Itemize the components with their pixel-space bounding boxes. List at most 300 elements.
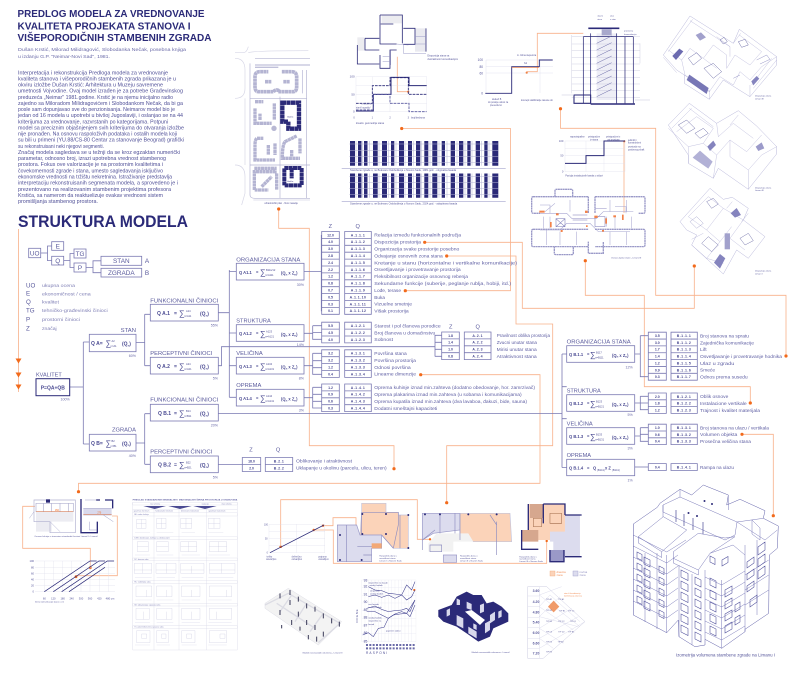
- box: QB.2 perceptivni cinioci: B22: [186, 461, 191, 465]
- image: apartment plan top: dvotraktnom komunikacijom: [427, 58, 458, 61]
- table: B.1.2: Trajnost i kvalitet materijala: [700, 408, 760, 413]
- image: apartment plan peach 1: Limani I u Novom Sadu: [379, 560, 403, 562]
- table: B.1.1: B.1.1.1: [677, 334, 691, 338]
- chart: span diamond table: TIP A1: [558, 598, 564, 601]
- box: zgrada: 40%: [129, 454, 137, 458]
- image: isometric apartment Limani III: Limani III: [755, 98, 764, 100]
- box: QB.2 perceptivni cinioci: 5%: [213, 476, 219, 480]
- box: QB.2 perceptivni cinioci: Q B.2: [158, 462, 171, 468]
- chart: span diamond table: TIP D3: [546, 642, 553, 644]
- table: B.1.2: 1.8: [655, 402, 660, 406]
- table: A.1.1: 3.0: [328, 247, 333, 251]
- box: QB.1 funkcionalni cinioci: 20%: [211, 424, 219, 428]
- chart: ratings by span: [355, 578, 416, 655]
- table: B.2: Uklapanje u okolinu (parcelu, ulicu, teren): [296, 466, 387, 471]
- table: A.1.1: A.1.1.10: [350, 295, 366, 299]
- table: A.1.1: A.1.1.6: [351, 268, 365, 272]
- table: A.1.3: A.1.3.1: [351, 352, 365, 356]
- box: organizacija stana B: n=B111: [595, 355, 604, 359]
- table: B.2: B.2.2: [274, 466, 284, 470]
- box: QB.1 funkcionalni cinioci: B14: [186, 409, 191, 413]
- image: apartment plan peach 3: Raspodela dana u: [519, 556, 538, 558]
- chart: ratings by span: poprečni zidovi: [386, 630, 401, 633]
- intro text block: Krstića, sa namerom da reaktuelizuje ovakav vrednosni sistem: [18, 193, 163, 199]
- table: B.1.1: Smeće: [700, 368, 715, 373]
- table: A.1.4: Oprema kupatila iznad min.zahteva (dva lavaboa, đakuzi, bide, sauna): [374, 399, 527, 404]
- box: QB.1 funkcionalni cinioci: ∑: [179, 409, 185, 418]
- image: minimum width tables sheet: apartman minimum: [134, 509, 150, 512]
- chart: span diamond table: TIP C1: [568, 611, 574, 613]
- title: PREDLOG MODELA ZA VREDNOVANJE: [18, 9, 205, 20]
- box: QB.1 funkcionalni cinioci: Q B.1: [158, 411, 171, 417]
- model key diagram: [29, 242, 150, 277]
- image: kitchen plans: Osnova kuhinje u stanovima standardni tlocrtovi Limani II i Limani I: [34, 535, 98, 538]
- box: QB.2 perceptivni cinioci: [150, 449, 219, 480]
- box: QB.2 perceptivni cinioci: ∑: [179, 461, 185, 470]
- table: B.1.3: Volumen objekta: [700, 432, 738, 437]
- chart: installation steps: Pozicija instalacionih kanala u zidovi: [565, 174, 603, 177]
- image: kitchen plans: 260: [55, 510, 60, 512]
- table: A.1.4: A.1.4.2: [351, 393, 365, 397]
- table: A.1.1: Fleksibilnost organizacije osnovnog rebenja: [374, 274, 468, 279]
- image: navy volume isometry: [438, 592, 511, 654]
- table: B.1.1: [648, 332, 782, 380]
- image: apartment plan peach 3: [519, 504, 582, 563]
- image: facades: [342, 141, 506, 206]
- image: isometric apartment Limani I: Limani I: [755, 273, 763, 275]
- box: zgrada: n=B1: [110, 444, 117, 448]
- box: struktura A: [236, 318, 305, 347]
- chart: apartment rating steps: [350, 75, 427, 125]
- legend: P: [26, 317, 30, 324]
- intro text block: model sa preciznim objašnjenjem svih kriterijuma do otvaranja izložbe: [18, 126, 184, 132]
- box: zgrada: ZGRADA: [112, 428, 136, 434]
- image: minimum width tables sheet: RC: roditeljska soba: [134, 581, 152, 584]
- box: QA.2 perceptivni cinioci: [150, 350, 219, 380]
- image: isometric apartment Limani III: Dispozicija stana: [755, 95, 772, 98]
- intro text block: jedan od 16 modela u upotrebi u bivšoj Jugoslaviji, i oslanjao se na 44: [17, 113, 183, 119]
- box: oprema B: [567, 453, 635, 482]
- table: A.1.1: 1.2: [328, 275, 333, 279]
- box: velicina A: [236, 350, 305, 380]
- chart: apartment rating steps: 100: [350, 75, 355, 79]
- box: velicina A: n: [294, 366, 296, 370]
- box: QA.1 funkcionalni cinioci: n: [206, 313, 208, 317]
- image: minimum width tables sheet: BK: radna kuhinja: [134, 514, 150, 516]
- legend: day and night zones: zona: [580, 573, 586, 577]
- table: A.1.4: 0.3: [328, 406, 333, 410]
- chart: span diamond table: TIP B1: [559, 611, 565, 613]
- chart: linear rating: ostvarljivo: [266, 558, 277, 561]
- authors text: [18, 47, 186, 59]
- box: stan: [89, 328, 137, 358]
- box: QA.2 perceptivni cinioci: 5%: [213, 376, 219, 380]
- chart: span diamond table: 4.20: [533, 600, 539, 604]
- chart: installation steps: konstruktivni: [628, 142, 641, 145]
- chart: linear rating: potpuno: [318, 555, 327, 558]
- box: oprema B: OPREMA: [567, 453, 591, 459]
- intro text block: umetnosti Vojvodine. Ovaj model izrađen je za potrebe Građevinskog: [18, 89, 183, 95]
- image: minimum width tables sheet: SO: obrazovanja: spavaća soba: [134, 604, 161, 606]
- table: B.1.1: B.1.1.4: [677, 355, 691, 359]
- chart: span diamond table: 4.80: [533, 610, 539, 614]
- box: QB.1 funkcionalni cinioci: n=B11: [184, 414, 192, 418]
- table: B.1.1: B.1.1.5: [677, 361, 691, 365]
- box: organizacija stana A: n: [286, 272, 288, 276]
- intro text block: su rekonstruisani neki njegovi segmenti.: [18, 144, 104, 150]
- box: struktura B: n: [617, 404, 619, 408]
- table: A.1.1: 2.2: [328, 268, 333, 272]
- table: A.1.1: A.1.1.7: [351, 275, 365, 279]
- image: apartment plan peach 1: Raspodela dana u: [379, 556, 398, 558]
- chart: corridor widths: 20: [31, 584, 35, 588]
- chart: span diamond table: stan ili kombinacija: [564, 592, 582, 595]
- image: facades: Stambene zgrade u, ne Bulevaru Oslobođenja u Novom Sadu, 1981.god. - originalna fasada: [350, 168, 457, 172]
- chart: span diamond table: 6.00: [533, 631, 539, 635]
- legend: Z: [26, 326, 30, 333]
- box: QA.2 perceptivni cinioci: Q A.2: [157, 364, 170, 370]
- chart: ratings by span: OCENE: [355, 609, 359, 623]
- box: oprema A: n=A141: [265, 399, 275, 403]
- table: B.1.1: 1.7: [655, 348, 660, 352]
- table: B.1.3: 0.6: [655, 433, 660, 437]
- caption: building isometry: Izometrija volumena stambene zgrade na Limanu I: [676, 653, 775, 658]
- table: B.1.2: [648, 393, 760, 413]
- box: QA.1 funkcionalni cinioci: n=A11: [184, 314, 192, 318]
- box: velicina B: n=B131: [595, 437, 605, 441]
- box: organizacija stana A: x Z: [287, 270, 295, 276]
- box: kvalitet: P=QA+QB: [41, 386, 65, 392]
- title: [18, 9, 212, 44]
- box: oprema A: [236, 383, 305, 412]
- legend: značaj: [42, 326, 57, 331]
- table: A.1.2: Sobnost: [374, 337, 394, 342]
- image: isometric apartment Limani III: [663, 16, 777, 100]
- box: QA.1 funkcionalni cinioci: (Q: [200, 312, 206, 318]
- image: minimum width tables sheet: funkcionalni minimum: [155, 510, 173, 512]
- table: A.1.2: 4.5: [328, 331, 333, 335]
- chart: ratings by span: 90: [364, 600, 367, 604]
- box: oprema B: =: [587, 466, 590, 471]
- table: A.1.3: 0.4: [328, 372, 333, 376]
- table: A.1.1: A.1.1.8: [351, 282, 365, 286]
- authors text: Dušan Krstić, Milorad Milidragović, Slobodanka Nečak, posebna knjiga: [18, 47, 186, 52]
- image: large isometric building: [633, 485, 778, 648]
- table: A.1.1: Kretanje u stanu (horizontalne i vertikalne komunikacije): [374, 260, 518, 265]
- chart: span diamond table: 3.60: [533, 589, 539, 593]
- table: A.1.1: Lođe, terase: [374, 288, 401, 293]
- legend: day and night zones: [550, 570, 588, 577]
- box: struktura B: ∑: [590, 399, 596, 408]
- box: stan: ): [129, 342, 131, 348]
- box: organizacija stana B: ORGANIZACIJA STANA: [567, 339, 631, 345]
- table: A.1.3: Površina stana: [374, 351, 407, 356]
- chart: installation steps: naprotstpaline: [570, 135, 585, 138]
- table: A.1.1: Relacija između funkcionalnih područja: [374, 233, 461, 238]
- intro text block: posle sam dopunjavao sve do penzionisanja. Neimarov model bio je: [18, 107, 175, 113]
- table: B.1.1: 0.3: [655, 375, 660, 379]
- model key diagram: E: [56, 243, 60, 250]
- box: organizacija stana A: B111/12: [266, 268, 276, 272]
- table: A.1.2: Starost i pol članova porodice: [374, 323, 441, 328]
- table: B.1.4: B.1.4.1: [677, 466, 691, 470]
- table: A.1.1: A.1.1.12: [350, 309, 366, 313]
- box: QA.2 perceptivni cinioci: n: [206, 366, 208, 370]
- image: isometric apartment Limani II: [668, 103, 777, 192]
- box: QA.2 perceptivni cinioci: (Q: [200, 364, 206, 370]
- chart: linear rating: teško: [267, 555, 273, 558]
- table: A.2: Pravilnost oblika prostorija: [497, 333, 550, 338]
- table: B.1.2: B.1.2.1: [677, 395, 691, 399]
- box: stan: Q A=: [91, 341, 103, 347]
- model key diagram: TG: [76, 251, 84, 258]
- chart: installation steps: zaj.prostora: [607, 138, 620, 141]
- table: A.1.1: [322, 224, 518, 314]
- chart: linear rating: delimično: [292, 556, 302, 558]
- box: zgrada: n: [128, 443, 130, 447]
- box: velicina B: [567, 420, 635, 450]
- table: A.1.4: Oprema plakarima iznad min.zahteva (u sobama i komunikacijama): [374, 392, 522, 397]
- table: A.1.3: A.1.3.2: [351, 358, 365, 362]
- box: QA.1 funkcionalni cinioci: FUNKCIONALNI ČINIOCI: [150, 298, 219, 305]
- table: A.2: [442, 325, 550, 360]
- table: B.1.1: 1.2: [655, 361, 660, 365]
- box: velicina A: (Q: [281, 364, 286, 370]
- legend: tehničko-građevinski činioci: [42, 308, 108, 313]
- box: organizacija stana B: =: [587, 352, 590, 357]
- box: QA.1 funkcionalni cinioci: ∑: [179, 309, 185, 318]
- chart: span diamond table: TIP D2: [558, 631, 564, 633]
- intro text block: Značaj modela sagledava se u težnji da se kroz egzaktan numerički: [18, 150, 180, 156]
- table: A.2: 1.0: [448, 348, 453, 352]
- image: minimum width tables sheet: dimenzioni maksimum: [181, 510, 200, 512]
- box: velicina A: ): [296, 364, 298, 370]
- table: A.1.4: Oprema kuhinje iznad min.zahteva (dodatno obedovanje, hor. zamrzivač): [374, 385, 535, 390]
- table: B.1.1: B.1.1.6: [677, 368, 691, 372]
- box: organizacija stana B: 12%: [625, 365, 633, 369]
- table: B.1.1: Lift: [700, 347, 707, 352]
- chart: installation steps: iz stana: [590, 138, 599, 141]
- box: organizacija stana A: 30%: [297, 283, 305, 287]
- table: B.1.1: Ulaz u zgradu: [700, 361, 735, 366]
- intro text block: prezentovano na realizovanim stambenim projektima profesora: [18, 187, 171, 193]
- box: organizacija stana A: ∑: [260, 268, 266, 277]
- box: velicina B: x Z: [618, 435, 626, 440]
- box: velicina B: B133: [596, 432, 603, 436]
- chart: linear rating: ostvarljivo: [292, 558, 303, 561]
- table: A.1.3: A.1.3.4: [351, 372, 365, 376]
- table: A.1.1: A.1.1.11: [350, 302, 366, 306]
- chart: apartment rating steps: 0: [353, 110, 355, 114]
- image: apartment plan peach 2: [422, 513, 512, 562]
- model key diagram: ZGRADA: [108, 270, 135, 277]
- box: organizacija stana A: ): [296, 270, 298, 276]
- table: B.1.1: B.1.1.3: [677, 348, 691, 352]
- table: B.1.1: Odnos prema susedu: [700, 374, 748, 380]
- table: A.2: A.2.2: [472, 341, 483, 345]
- table: B.1.4: [648, 464, 734, 470]
- legend: ekonomičnost / cena: [42, 291, 92, 296]
- table: A.1.4: 1.2: [328, 386, 333, 390]
- table: A.1.1: A.1.1.5: [351, 261, 365, 265]
- chart: span diamond table: 7.20: [533, 652, 539, 656]
- box: QA.2 perceptivni cinioci: ): [207, 364, 209, 370]
- box: oprema B: Q: [593, 466, 597, 471]
- table: A.1.4: A.1.4.1: [351, 386, 365, 390]
- intro text block: [17, 70, 184, 205]
- box: QA.2 perceptivni cinioci: n=A21: [184, 367, 192, 371]
- box: oprema A: =: [256, 396, 259, 401]
- table: A.1.1: 0.5: [328, 295, 333, 299]
- table: B.1.1: 0.9: [655, 368, 660, 372]
- chart: installation steps: [559, 135, 645, 177]
- box: QA.1 funkcionalni cinioci: Q A.1: [157, 311, 170, 317]
- table: B.1.1: Broj stanova na spratu: [700, 333, 749, 338]
- chart: corridor widths: 0: [33, 590, 35, 594]
- chart: ratings by span: 86: [364, 631, 367, 635]
- image: apartment plan peach 2: raznolikost stana: [460, 557, 477, 560]
- model key diagram: P: [78, 265, 82, 272]
- box: organizacija stana A: ORGANIZACIJA STANA: [236, 258, 301, 264]
- chart: ratings by span: 93: [364, 578, 367, 582]
- table: A.1.4: Dodatni smeštajni kapaciteti: [374, 406, 437, 411]
- image: navy volume isometry: Modeli novonastalih volumena - Limani I: [472, 651, 511, 654]
- table: A.1.1: 0.8: [328, 282, 333, 286]
- chart: ratings by span: stepenište na: [368, 620, 382, 623]
- table: A.1.1: A.1.1.3: [351, 247, 365, 251]
- chart: span diamond table: 5.40: [533, 621, 539, 625]
- table: B.1.2: Instalacione vertikale: [700, 401, 747, 406]
- box: organizacija stana A: Q A1.1: [239, 270, 253, 275]
- image: facades: Stambene zgrade u, ne Bulevaru Oslobođenja u Novom Sadu, 2024.god. - adaptirana fasada: [350, 202, 458, 206]
- box: QA.2 perceptivni cinioci: A24: [186, 362, 191, 366]
- table: B.1.2: B.1.2.2: [677, 402, 691, 406]
- image: minimum width tables sheet: TC: pokretni/krevetna spavaća soba: [134, 626, 165, 629]
- box: QB.2 perceptivni cinioci: n: [206, 465, 208, 469]
- table: A.1.2: A.1.2.3: [351, 338, 365, 342]
- table: B.1.1: Osvetljavanje i provetravanje hodnika: [700, 354, 782, 359]
- box: struktura A: x Z: [287, 332, 295, 337]
- table: B.1.3: 0.4: [655, 440, 660, 444]
- image: building elevation: u stan: [610, 18, 617, 21]
- box: organizacija stana A: =: [256, 270, 259, 275]
- box: QA.1 funkcionalni cinioci: =: [174, 311, 177, 317]
- table: B.1.2: 2.0: [655, 395, 660, 399]
- image: isometric apartment Limani II: Dispozicija stana: [755, 186, 772, 189]
- box: organizacija stana A: (Q: [281, 270, 286, 276]
- box: oprema B: (B141): [612, 468, 620, 472]
- model key diagram: STAN: [113, 258, 130, 265]
- chart: corridor widths: [30, 559, 115, 604]
- box: QA.1 funkcionalni cinioci: A14: [186, 309, 191, 313]
- chart: building width steps: 80: [479, 65, 483, 69]
- box: oprema B: x Z: [605, 466, 611, 471]
- table: A.2: Mirisi unutar stana: [497, 347, 537, 352]
- chart: apartment rating steps: broj/bedrona: [411, 117, 426, 120]
- table: A.1.1: 2.4: [328, 261, 333, 265]
- chart: ratings by span: 85: [364, 639, 367, 643]
- chart: apartment rating steps: 3: [408, 117, 410, 120]
- table: B.1.3: 1.0: [655, 426, 660, 430]
- chart: building width steps: 60: [479, 72, 483, 76]
- box: organizacija stana B: ): [627, 353, 629, 358]
- box: velicina A: 8%: [299, 376, 305, 380]
- chart: ratings by span: fasadi: [368, 624, 375, 626]
- legend: TG: [26, 307, 35, 314]
- chart: apartment rating steps: 50: [351, 92, 355, 96]
- box: struktura B: =: [587, 401, 590, 406]
- table: A.2: 1.4: [448, 341, 453, 345]
- box: velicina B: ): [627, 435, 629, 440]
- image: building elevation: otvor: [597, 18, 602, 21]
- chart: installation steps: jedinični: [627, 140, 637, 142]
- image: minimum width tables sheet: varijacija: [202, 503, 210, 505]
- box: QB.2 perceptivni cinioci: =: [174, 462, 177, 468]
- box: struktura B: 5%: [627, 413, 633, 417]
- image: apartment plan top: Dispozicija stana sa: [427, 55, 450, 58]
- intro text block: zajedno sa Miloradom Milidragovićem i Slobodankom Nečak, da bi ga: [18, 101, 183, 107]
- table: A.2: A.2.4: [472, 354, 483, 358]
- box: velicina A: ∑: [260, 362, 266, 371]
- box: QB.1 funkcionalni cinioci: (Q: [200, 412, 206, 418]
- legend: E: [26, 291, 30, 298]
- table: A.1.1: 2.8: [328, 254, 333, 258]
- box: zgrada: (Q: [122, 441, 128, 447]
- chart: span diamond table: TIP E2: [558, 642, 564, 644]
- legend: ukupna ocena: [42, 283, 76, 288]
- chart: span diamond table: TIP A2: [546, 598, 552, 601]
- chart: span diamond table: TIP E1: [568, 631, 574, 633]
- table: A.1.1: 0.1: [328, 309, 333, 313]
- box: struktura A: A123: [266, 329, 273, 333]
- chart: building width steps: 100: [478, 58, 483, 62]
- box: stan: (Q: [122, 342, 128, 348]
- table: A.1.3: 3.2: [328, 352, 333, 356]
- table: B.2: Z: [249, 448, 253, 454]
- box: struktura B: n: [625, 404, 627, 408]
- model key diagram: B: [145, 270, 149, 277]
- table: B.2: 18.0: [248, 459, 255, 463]
- image: building elevation: [562, 16, 650, 104]
- box: zgrada: ∑: [106, 439, 112, 448]
- image: minimum width tables sheet: PREGLED STANDARDNIH MINIMALNIH I MAKSIMALNIH ŠIRINA PROSTORIJA U STANOVIMA: [133, 499, 238, 502]
- table: A.1.1: Sekundarne funkcije (suberije, peglanje rublja, hobiji, itd.): [374, 281, 511, 286]
- chart: linear rating: 100: [264, 524, 269, 526]
- chart: span diamond table: TIP C3: [546, 631, 553, 633]
- box: velicina A: x Z: [287, 364, 295, 370]
- chart: corridor widths: 420: [97, 596, 102, 600]
- box: organizacija stana B: n: [617, 355, 619, 359]
- box: oprema A: A144: [266, 394, 273, 398]
- chart: span diamond table: kombinacija stanova: [564, 595, 583, 598]
- table: A.1.1: A.1.1.9: [351, 288, 365, 292]
- box: organizacija stana A: n=A111: [265, 273, 274, 277]
- image: urban site plan: [235, 47, 310, 205]
- chart: corridor widths: 240: [69, 596, 74, 600]
- table: A.1.1: Buka: [374, 295, 385, 300]
- box: oprema A: ): [296, 396, 298, 402]
- box: velicina A: Q A1.3: [239, 364, 253, 369]
- table: A.1.4: 0.6: [328, 400, 333, 404]
- table: A.1.2: A.1.2.2: [351, 331, 365, 335]
- intro text block: ekonomske vrednosti na tržištu nekretnina. Istraživanje predstavlja: [18, 174, 172, 180]
- box: velicina B: n: [617, 437, 619, 441]
- table: A.1.1: Višak prostorija: [374, 309, 409, 314]
- table: A.2: Zvucni unutar stana: [497, 340, 537, 345]
- chart: apartment rating steps: 2: [389, 117, 391, 120]
- chart: apartment rating steps: 0: [353, 117, 355, 120]
- chart: building width steps: do postoje uslovi za: [488, 101, 509, 104]
